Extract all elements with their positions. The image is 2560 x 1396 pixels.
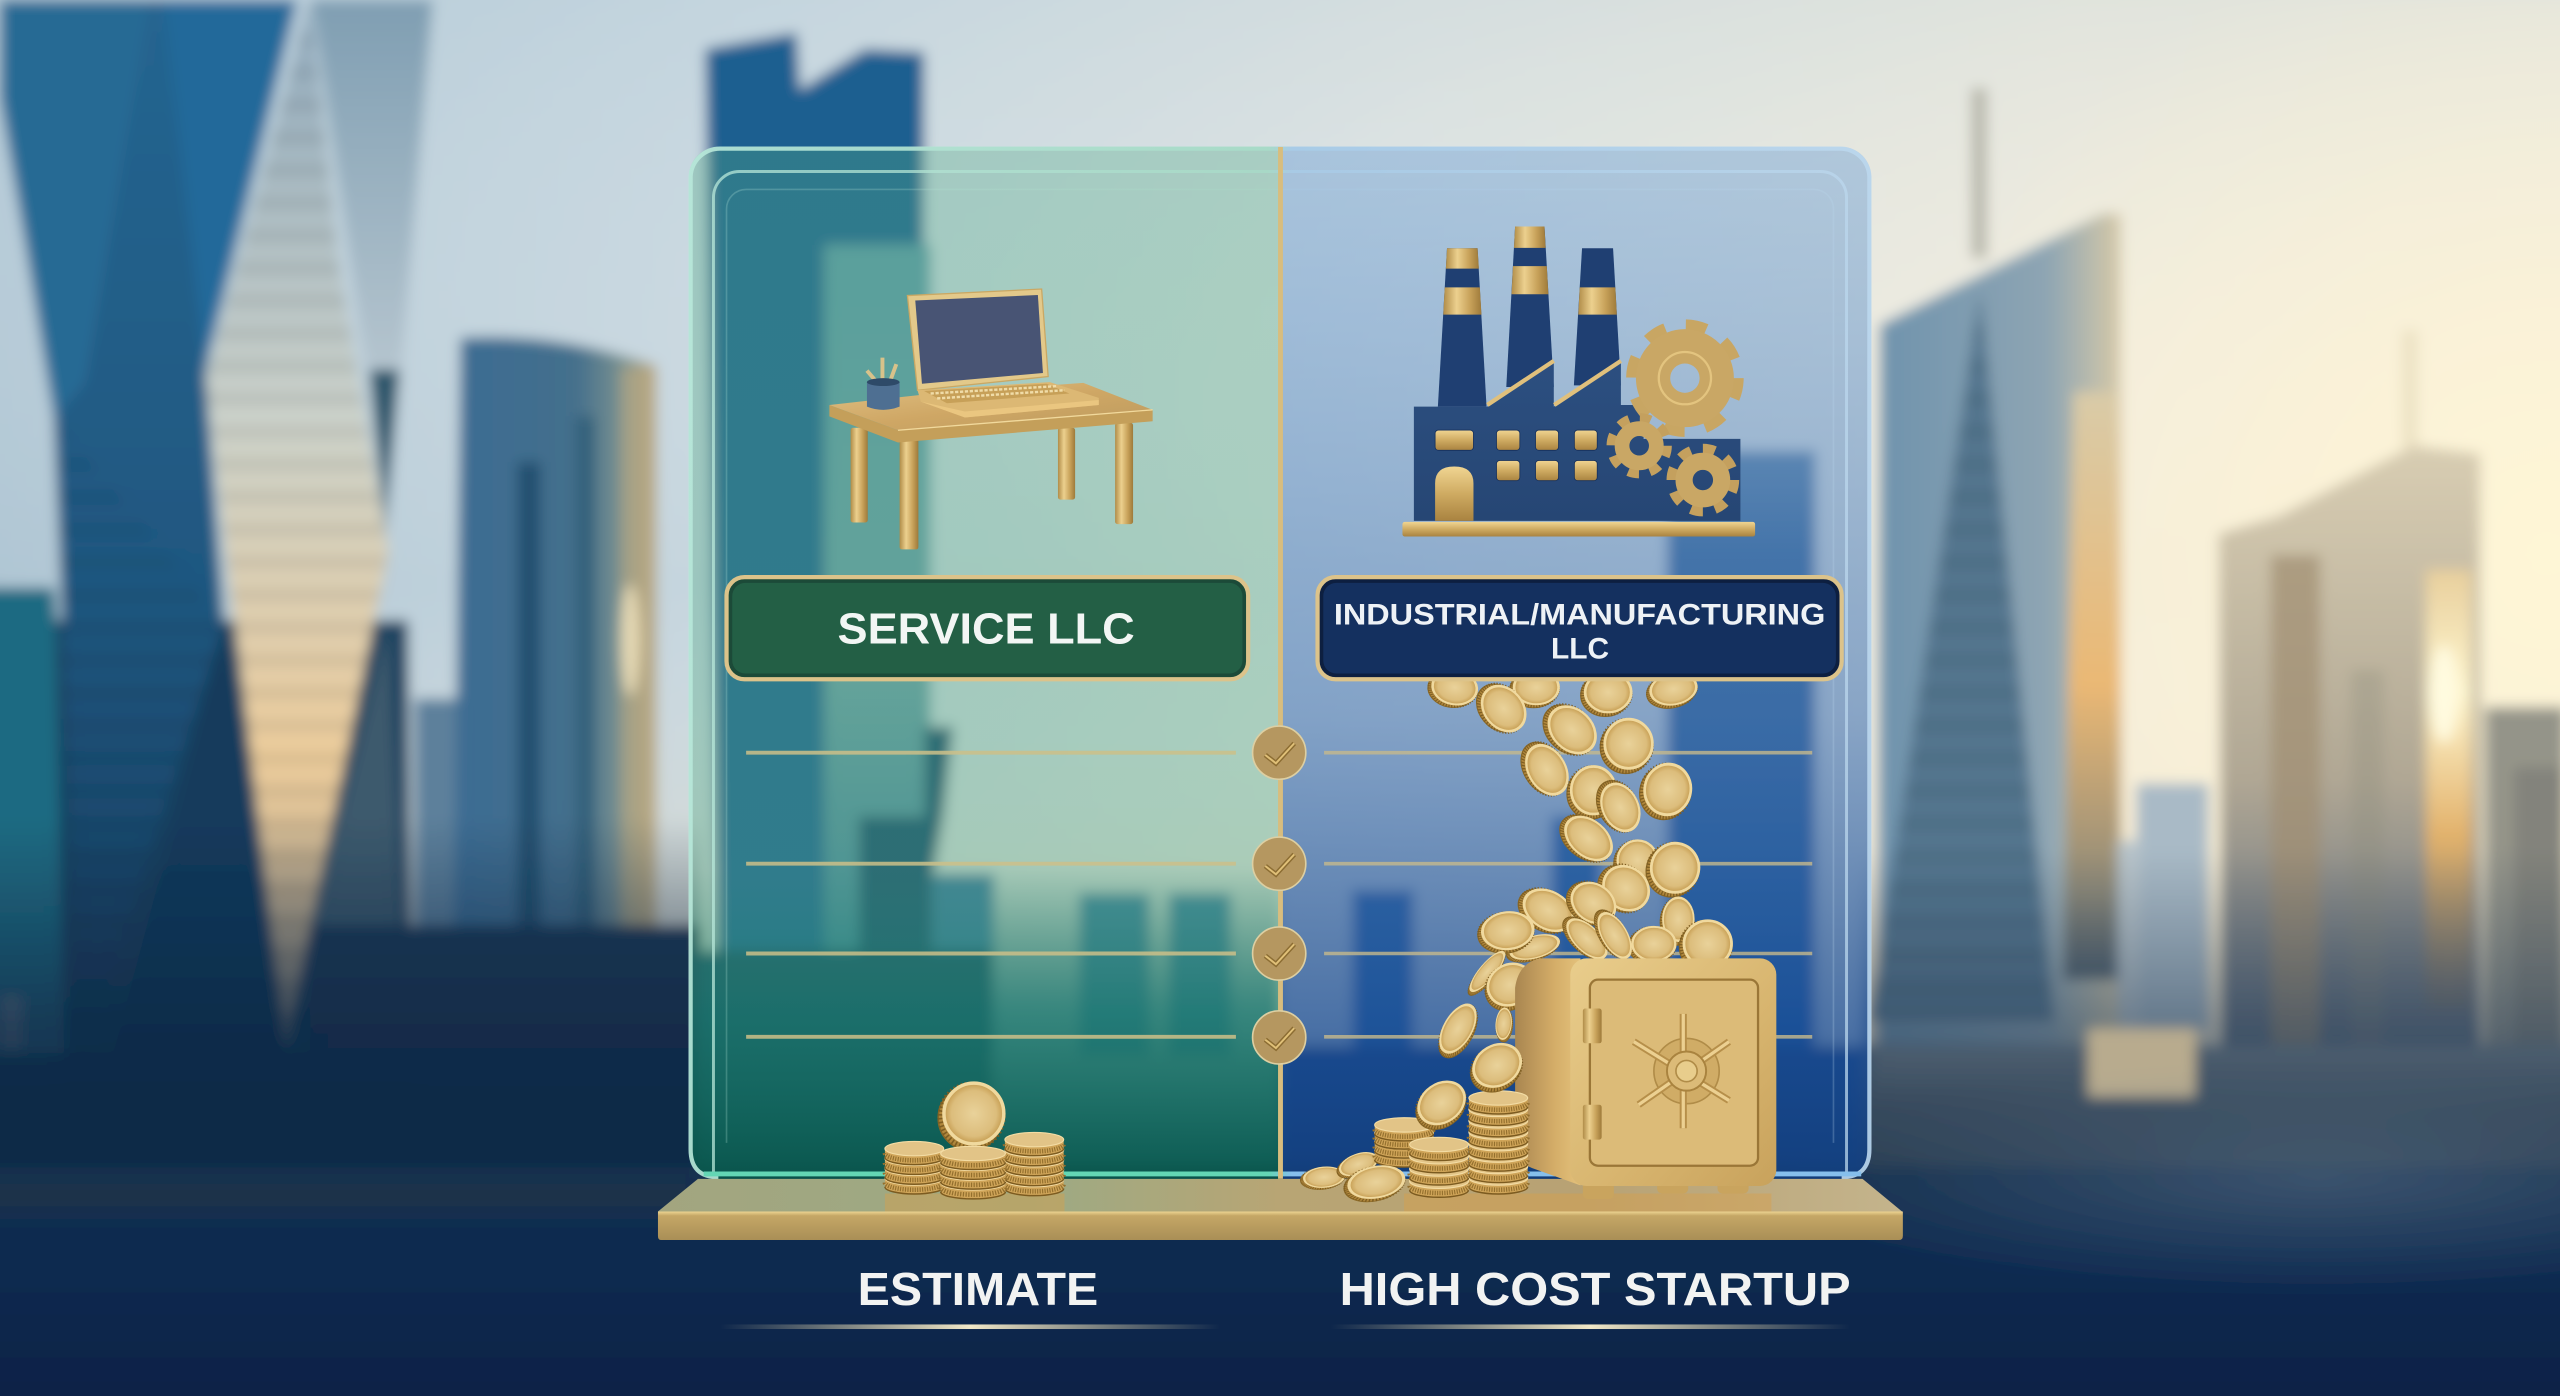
label: Service LLC <box>727 577 1248 679</box>
shelf front edge <box>658 1211 1903 1240</box>
panel: glass comparison board <box>689 147 1871 1179</box>
row lines: left column <box>746 753 1236 1037</box>
coins: large stacks beside safe <box>1300 999 1531 1206</box>
glass frame inner edge <box>713 171 1847 1172</box>
caption: High cost startup: HIGH COST STARTUP <box>1340 1263 1851 1315</box>
check badge 3 <box>1253 927 1306 980</box>
factory door <box>1435 466 1473 521</box>
desk top <box>829 383 1153 442</box>
icon: laptop on desk <box>829 289 1153 549</box>
caption: Estimate: ESTIMATE <box>858 1263 1098 1315</box>
shelf reflections <box>885 1194 1771 1211</box>
gear small bottom <box>1672 449 1734 511</box>
center divider <box>1278 147 1283 1179</box>
safe side <box>1515 958 1580 1185</box>
spilled coins on shelf <box>1300 1148 1381 1191</box>
chimney 2 <box>1506 226 1554 387</box>
glass frame faint third edge <box>727 189 1833 1143</box>
check badge 4 <box>1253 1011 1306 1064</box>
coin stack tall <box>1469 1091 1528 1194</box>
coin stack middle <box>941 1146 1005 1199</box>
shelf: gold base <box>658 1179 1903 1240</box>
icon: factory with gears <box>1402 226 1755 537</box>
gear small top <box>1611 418 1667 474</box>
coin stack back <box>1375 1118 1433 1167</box>
panel: right blue glass <box>1280 147 1871 1179</box>
safe wheel <box>1634 1014 1729 1128</box>
safe front <box>1570 958 1776 1186</box>
label: Industrial/Manufacturing LLC: INDUSTRIAL/MANUFACTURING <box>1334 599 1825 632</box>
standing coin <box>938 1083 1004 1150</box>
coin stack right <box>1005 1132 1064 1196</box>
laptop screen <box>907 289 1048 390</box>
factory body <box>1414 362 1740 521</box>
label: Industrial/Manufacturing LLC <box>1318 577 1842 679</box>
coins: small estimate stacks <box>885 1083 1064 1199</box>
laptop keyboard <box>918 382 1099 418</box>
label: Industrial/Manufacturing LLC: LLC <box>1551 633 1609 666</box>
icon: gold safe <box>1515 958 1776 1199</box>
panel: left green glass <box>689 147 1280 1179</box>
glass base line <box>704 1172 1861 1175</box>
coins: falling stream into safe <box>1425 666 1732 1019</box>
chimney 1 <box>1438 248 1487 407</box>
coins tumbling in front <box>1341 999 1531 1206</box>
check badges on divider <box>1253 726 1306 1064</box>
chimney 3 <box>1574 248 1621 385</box>
factory base <box>1402 522 1755 537</box>
towers behind the glass <box>705 33 924 1045</box>
row lines: right column <box>1324 753 1812 1037</box>
factory windows <box>1435 430 1597 481</box>
safe door <box>1590 980 1758 1166</box>
coin stack front <box>1410 1137 1468 1197</box>
pen cup <box>867 358 900 410</box>
coin stack left <box>885 1141 944 1194</box>
safe hinges <box>1583 1009 1602 1140</box>
glass frame outer edge <box>691 149 1869 1177</box>
desk legs <box>851 423 1133 549</box>
caption: Estimate <box>720 1263 1220 1329</box>
gear large <box>1634 328 1736 429</box>
check badge 2 <box>1253 837 1306 890</box>
check badge 1 <box>1253 726 1306 779</box>
roof trim <box>1487 361 1621 405</box>
label: Service LLC: SERVICE LLC <box>838 605 1135 653</box>
shelf top surface <box>658 1179 1902 1211</box>
safe feet <box>1583 1179 1749 1199</box>
